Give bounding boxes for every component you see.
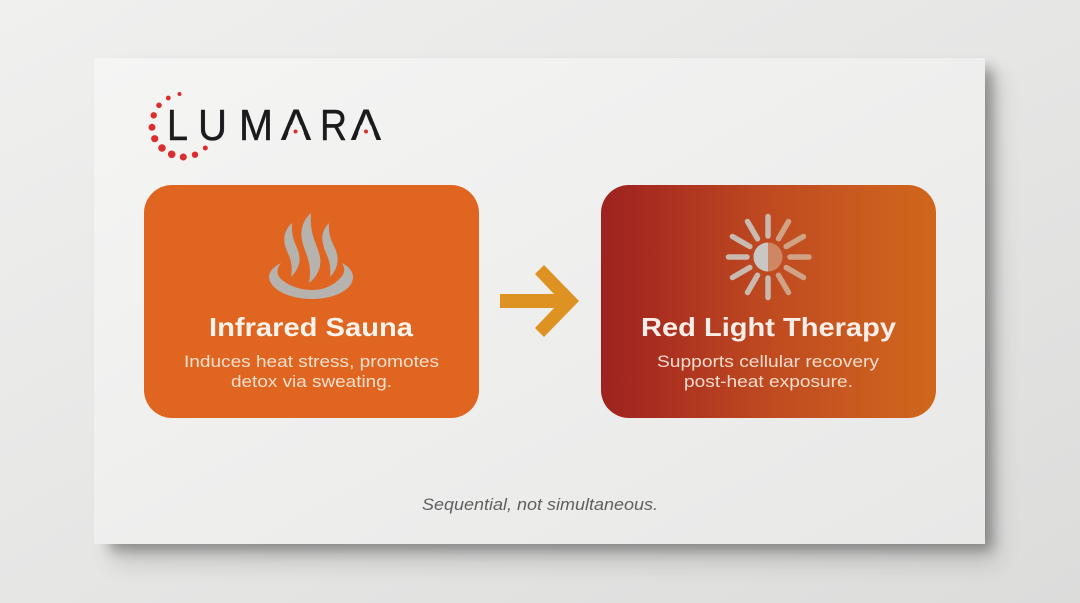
description: Supports cellular recovery xyxy=(657,352,880,371)
description xyxy=(657,352,880,391)
description: post-heat exposure. xyxy=(684,372,853,391)
wordmark: R xyxy=(320,101,347,150)
footnote: Sequential, not simultaneous. xyxy=(422,496,658,514)
logo: Lumara xyxy=(148,92,382,160)
description: Induces heat stress, promotes xyxy=(184,352,439,371)
wordmark: A xyxy=(281,101,312,150)
wordmark: A xyxy=(351,101,382,150)
panel: slide card xyxy=(94,58,985,544)
paper shadow xyxy=(110,68,998,562)
panel: red light therapy xyxy=(601,185,936,418)
icon: half sun xyxy=(728,216,809,298)
description xyxy=(184,352,439,391)
description: detox via sweating. xyxy=(231,372,392,391)
logo crossbar covers and red dots xyxy=(288,125,374,134)
wordmark xyxy=(167,101,382,150)
icon: red dot ring xyxy=(148,92,208,160)
wordmark: M xyxy=(239,101,273,150)
panel: infrared sauna xyxy=(144,185,479,418)
heading: Red Light Therapy xyxy=(641,312,897,342)
heading: Infrared Sauna xyxy=(209,312,414,342)
wordmark: U xyxy=(198,101,227,150)
wordmark: L xyxy=(167,101,188,150)
arrow xyxy=(500,265,579,337)
icon: steam over basin xyxy=(269,213,353,299)
